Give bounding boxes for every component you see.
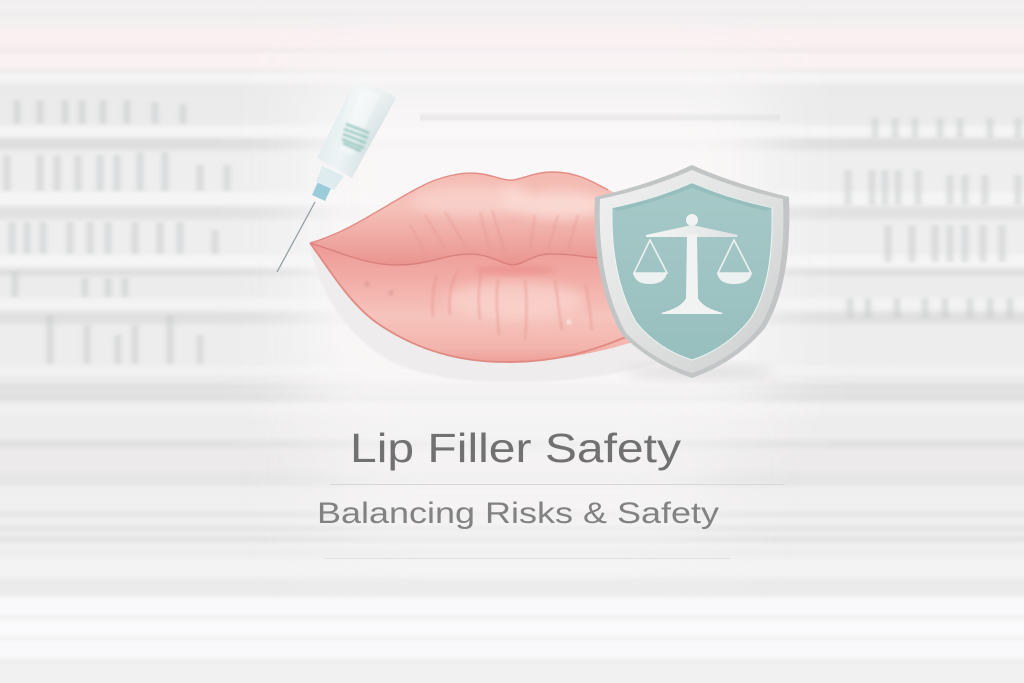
upper lip <box>310 172 640 362</box>
shield shadow <box>625 365 775 379</box>
syringe thread band <box>342 124 369 151</box>
syringe barrel <box>317 84 396 178</box>
icon: shield with scales <box>594 165 789 378</box>
lip backing shadow <box>310 245 660 382</box>
lip outline <box>310 172 608 243</box>
shelf ticks: right <box>848 118 1018 318</box>
shield outer rim <box>594 165 789 378</box>
right pan <box>717 240 752 284</box>
shelf ticks: left <box>7 100 227 364</box>
left pan <box>633 240 667 284</box>
lower lip <box>310 243 640 362</box>
scale beam and pillar <box>686 214 698 226</box>
shield teal face <box>612 183 772 360</box>
central glow <box>300 70 770 420</box>
needle hub <box>312 173 333 201</box>
subtitle: Balancing Risks & Safety <box>317 497 719 530</box>
lips illustration <box>310 172 660 382</box>
icon: syringe <box>277 84 396 272</box>
title: Lip Filler Safety <box>350 425 682 471</box>
needle <box>277 202 315 272</box>
scales of justice <box>633 214 752 314</box>
